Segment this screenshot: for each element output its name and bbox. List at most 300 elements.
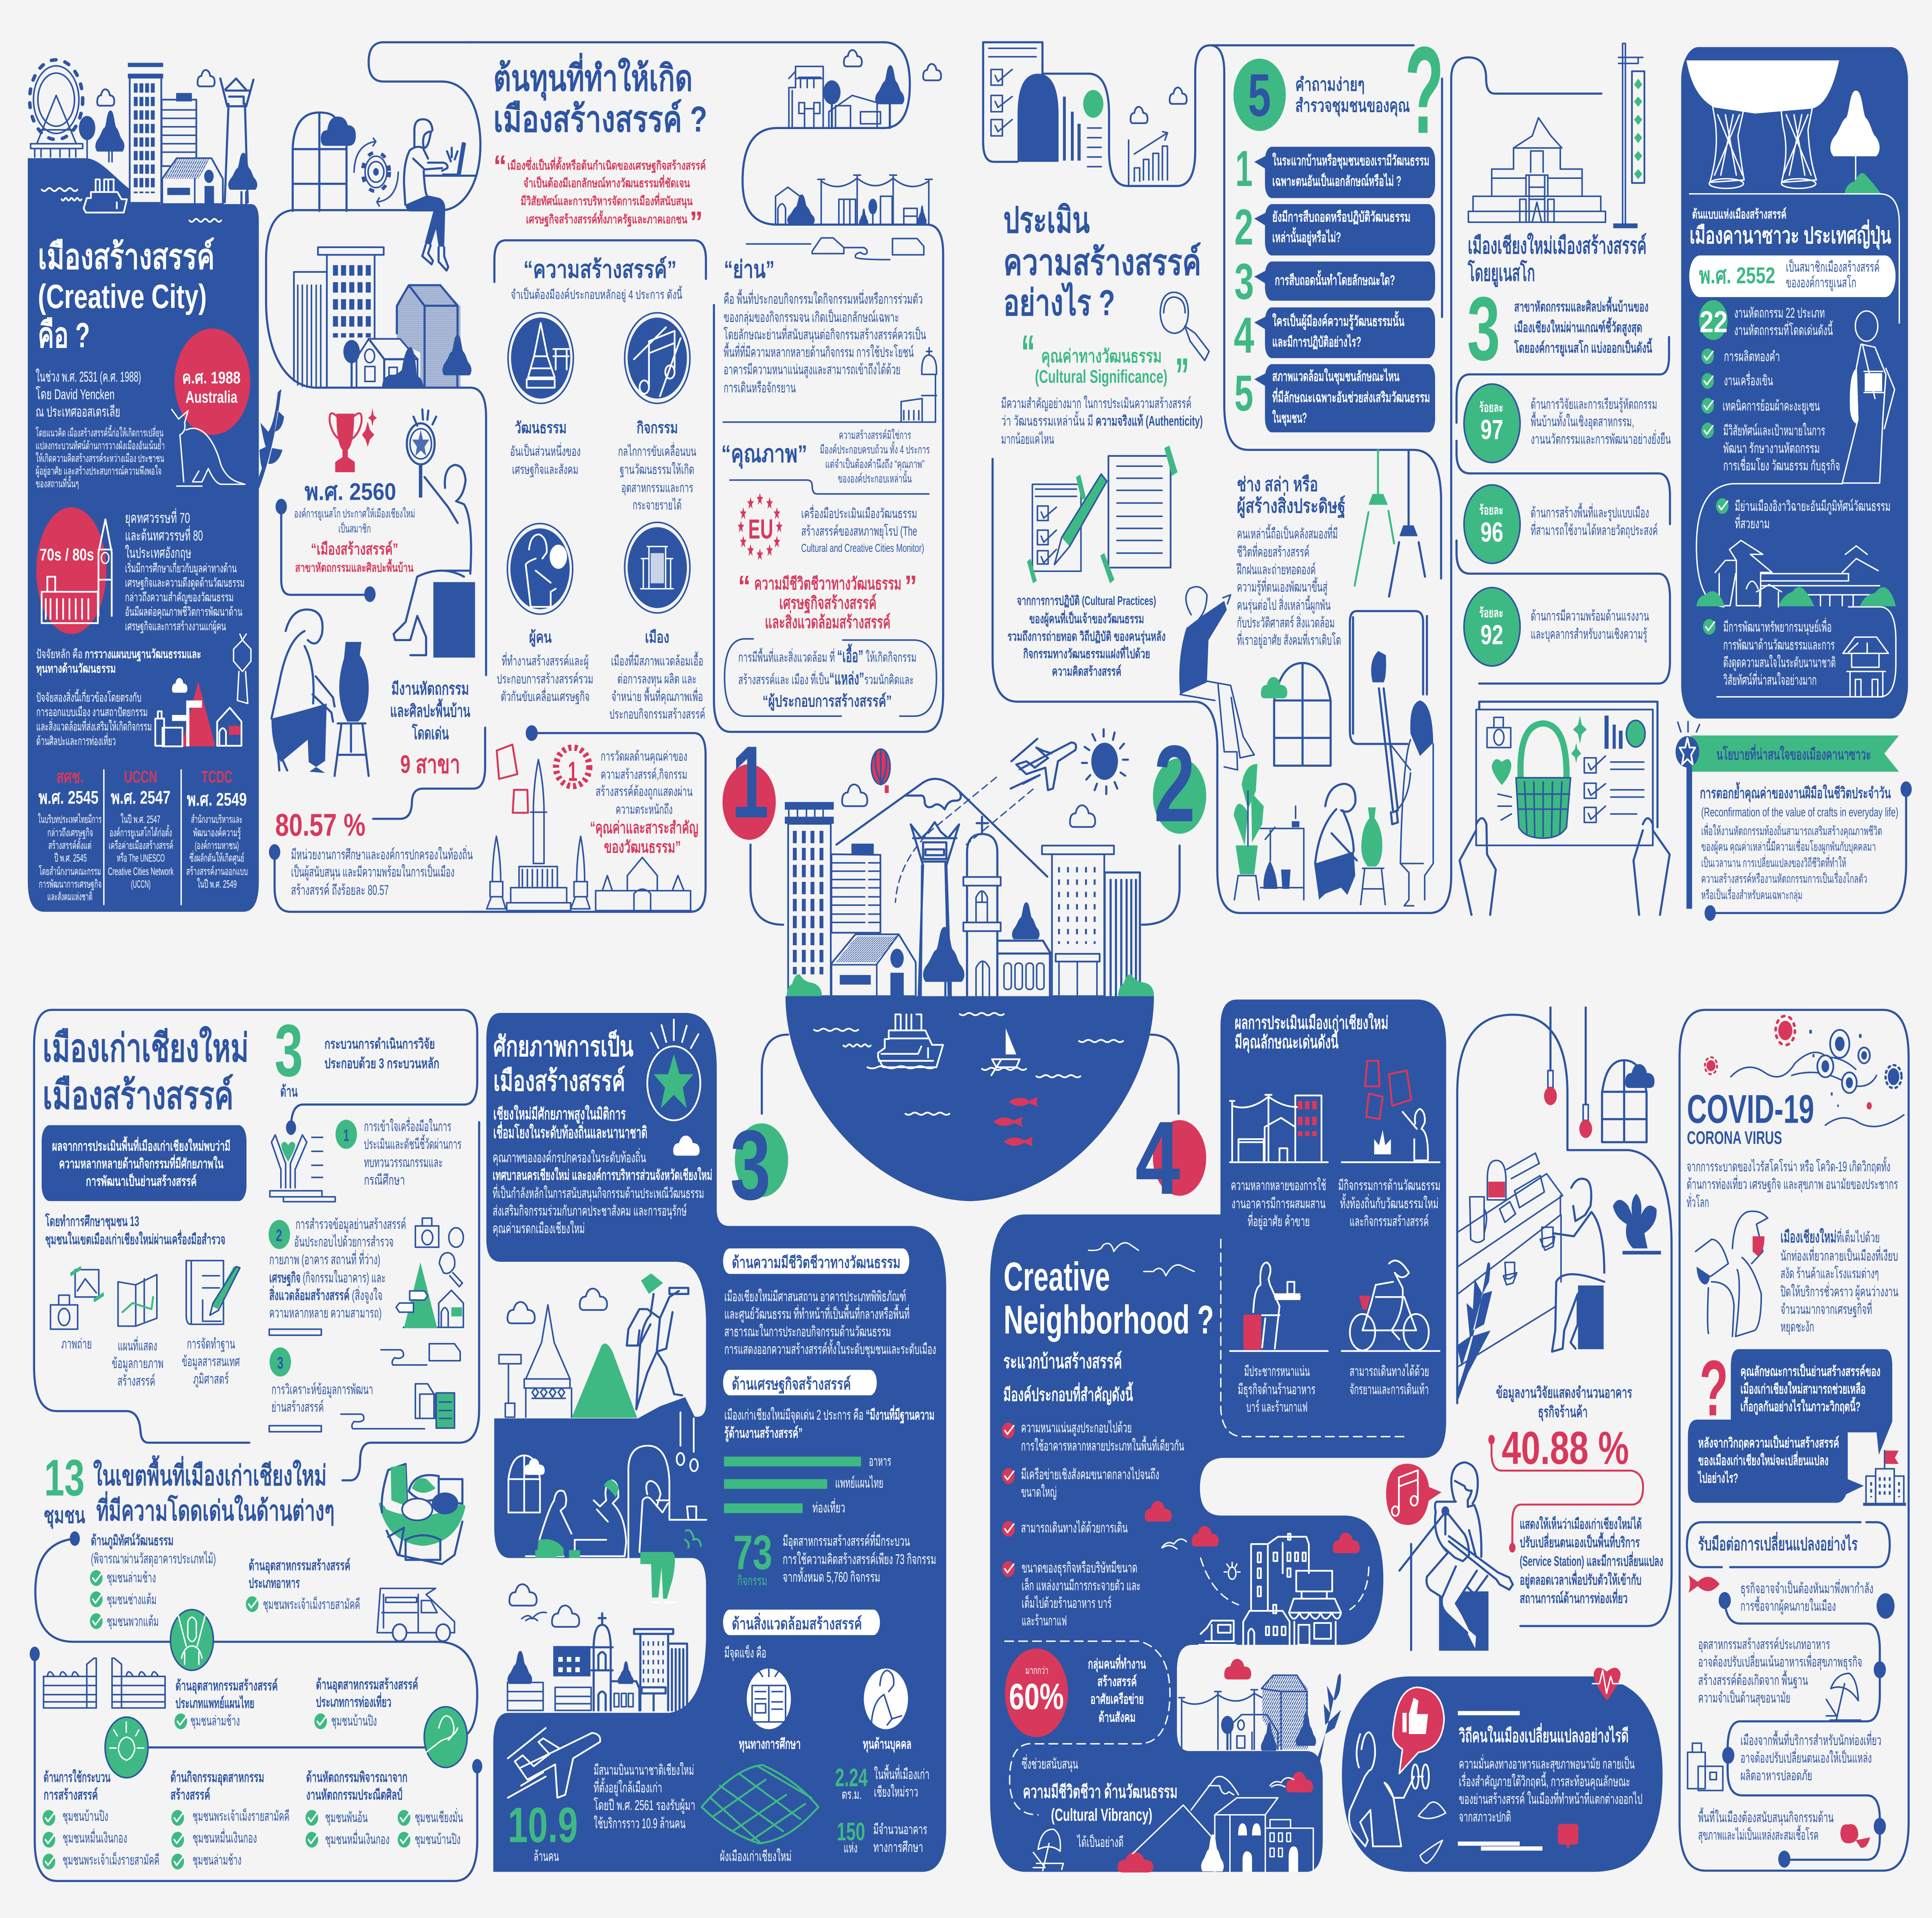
- heading: three processes: [275, 1009, 439, 1100]
- illustration: traveller with temple: [499, 1273, 688, 1418]
- question 4: [1234, 307, 1435, 364]
- stat: airport 10.9: ที่ตั้งอยู่ใกล้เมืองเก่า: [594, 1777, 662, 1796]
- flow: coping measures: อาจต้องปรับเปลี่ยนตนเองให้เป็นแหล่ง: [1740, 1748, 1872, 1766]
- stat: 150 buildings: มีจำนวนอาคาร: [873, 1822, 927, 1838]
- illustration: old town skyline: [507, 1584, 687, 1710]
- column: NESDC 2545: สศช.: [56, 768, 83, 786]
- illustration: man at cafe: [1552, 1179, 1604, 1351]
- illustration: viruses: [1705, 1016, 1904, 1127]
- text: intro: จากการระบาดของไวรัสโคโรน่า หรือ โควิด-19 เกิดวิกฤตทั้ง: [1687, 1156, 1890, 1175]
- text: intro: แปลงกระบวนทัศน์ด้านการวางผังเมืองอันเน้นย้ำ: [36, 437, 165, 452]
- text: potential: คุณค่ามรดกเมืองเชียงใหม่: [493, 1221, 585, 1237]
- tower: [911, 822, 959, 996]
- column: TCDC 2549: สำนักงานบริหารและ: [191, 813, 242, 825]
- text: cultural practices: [1007, 594, 1165, 679]
- flow: coping measures: เมืองจากพื้นที่บริการสำหรับนักท่องเที่ยว: [1740, 1730, 1881, 1748]
- speech bubbles: questions: [1688, 1344, 1892, 1503]
- heading: ประเมิน: [1003, 199, 1090, 240]
- text: district: อาคารมีความหนาแน่นสูงและสามารถเข้าถึงได้ด้วย: [724, 361, 900, 378]
- stat: 80.57 percent: สร้างสรรค์ ถึงร้อยละ 80.57: [291, 882, 389, 898]
- icon: database tool: [182, 1261, 240, 1388]
- panel: assessing creativity: [983, 21, 1451, 913]
- text: city life change: [1458, 1711, 1643, 1851]
- column: UCCN 2547: UCCN: [124, 768, 157, 786]
- icon: heart pulse: [1592, 1668, 1622, 1701]
- section: creative economy: มีอุตสาหกรรมสร้างสรรค์ที่มีกระบวน: [783, 1531, 910, 1550]
- text: key factors: ทุนทางด้านวัฒนธรรม: [36, 662, 116, 677]
- illustration: buildings in light cutout: [1179, 1675, 1316, 1751]
- stat: 92 percent: และบุคลากรสำหรับงานเชิงความรู้: [1531, 627, 1647, 643]
- list: crafts: มีวิสัยทัศน์และเป้าหมายในการ: [1723, 423, 1825, 439]
- group: creative industry activity: [170, 1770, 289, 1869]
- question 1: 1: [1235, 140, 1253, 197]
- icon: leaf branch: [1457, 1263, 1492, 1403]
- list: elements: สามารถเดินทางได้ด้วยการเดิน: [1021, 1520, 1128, 1536]
- list: crafts: งานเครื่องเขิน: [1724, 371, 1773, 389]
- bar chart: creative jobs: [724, 1453, 891, 1516]
- callout: cultural value: “คุณค่าและสาระสำคัญ: [590, 819, 698, 838]
- heading: [1003, 1243, 1214, 1405]
- list: crafts: [1699, 300, 1840, 474]
- stat: 80.57 percent: เป็นผู้สนับสนุน และมีความพร้อมในการเป็นเมือง: [291, 863, 454, 881]
- number 2: 2: [1154, 723, 1195, 844]
- group: cultural landscape: ชุมชนล่ามช้าง: [107, 1570, 156, 1586]
- panel: creative capital left outline and art: [259, 42, 537, 912]
- icon: heart message: [1558, 1824, 1578, 1850]
- text: cultural practices: กิจกรรมทางวัฒนธรรมแฝงที่ไปด้วย: [1023, 645, 1150, 661]
- feature: cultural activities: มีกิจกรรมการด้านวัฒนธรรม: [1338, 1178, 1440, 1193]
- column: NESDC 2545: และสังคมแห่งชาติ: [48, 891, 92, 903]
- group: cultural landscape: (พิจารณาผ่านวัสดุอาคารประเภทไม้): [91, 1551, 216, 1567]
- stat: more than 60 percent: [1005, 1641, 1170, 1815]
- icon: photo tool: [51, 1266, 104, 1352]
- stat: 96 percent: 96: [1481, 517, 1503, 548]
- illustration: cafe counter: [1458, 1153, 1563, 1367]
- text: 2560 award: สาขาหัตถกรรมและศิลปะพื้นบ้าน: [295, 558, 413, 575]
- group: fine crafts: [306, 1770, 463, 1848]
- list: crafts: การผลิตทองคำ: [1724, 349, 1780, 364]
- stat: 97 percent: งานนวัตกรรมและการพัฒนาอย่างยั่งยืน: [1531, 430, 1671, 447]
- list: elements: ขนาดใหญ่: [1021, 1484, 1057, 1500]
- text: service station: อยู่ตลอดเวลาเพื่อปรับตัวให้เข้ากับ: [1520, 1570, 1641, 1589]
- list: elements: ขนาดของธุรกิจหรือบริษัทมีขนาด: [1022, 1561, 1138, 1576]
- text: cultural practices: รวมถึงการถ่ายทอด วิถีปฏิบัติ ของคนรุ่นหลัง: [1007, 629, 1165, 645]
- icon: EU stars: [738, 493, 782, 560]
- text: nine branches: 9 สาขา: [400, 751, 460, 779]
- text: intro: โดย David Yencken: [36, 386, 115, 403]
- illustration: laptop worker, window and buildings: [293, 112, 475, 388]
- panel: what is a creative city: [28, 60, 259, 912]
- element: city: เมืองที่มีสภาพแวดล้อมเอื้อ: [611, 652, 703, 668]
- group: thai medicine: ชุมชนล่ามช้าง: [190, 1714, 240, 1729]
- element: people: ประกอบการสร้างสรรค์รวม: [497, 672, 594, 686]
- list: crafts: 22: [1699, 305, 1728, 339]
- column: TCDC 2549: TCDC: [201, 768, 232, 786]
- quote: cultural significance: คุณค่าทางวัฒนธรรม: [1041, 346, 1162, 368]
- stat: 97 percent: ด้านการวิจัยและการเรียนรู้หัตถกรรม: [1531, 397, 1657, 413]
- section: cultural vibrancy: การแสดงออกความสร้างสรรค์ทั้งในระดับชุมชนและระดับเมือง: [724, 1339, 936, 1358]
- list: crafts: การเชื่อมโยง วัฒนธรรม กับธุรกิจ: [1723, 456, 1840, 474]
- text: tourists gone: จำนวนมากจากเศรษฐกิจที่: [1781, 1300, 1872, 1318]
- icon: photo tool: ภาพถ่าย: [61, 1336, 92, 1352]
- text: craftsmen: ผู้สร้างสิ่งประดิษฐ์: [1237, 492, 1345, 519]
- text: 2560 award: องค์การยูเนสโก ประกาศให้เมืองเชียงใหม่: [294, 507, 415, 521]
- callout: result: การพัฒนาเป็นย่านสร้างสรรค์: [86, 1173, 197, 1189]
- group: fine crafts: ชุมชนบ้านปิง: [415, 1832, 461, 1848]
- feature: mixed use: [1230, 1095, 1328, 1230]
- column: NESDC 2545: [38, 768, 181, 905]
- text: reconfirmation of crafts: การตอกย้ำคุณค่าของงานฝีมือในชีวิตประจำวัน: [1700, 782, 1891, 803]
- text: city life change: ของย่านสร้างสรรค์ ในเมืองที่ทำหน้าที่แตกต่างออกไป: [1459, 1789, 1643, 1807]
- heading: 13 communities: 13: [44, 1449, 85, 1507]
- pill: 2552: ขององค์การยูเนสโก: [1786, 275, 1856, 291]
- number 3 with text: 3: [1467, 278, 1500, 380]
- text: cultural vibrancy: [1022, 1754, 1177, 1850]
- icon: trophy: [330, 408, 377, 472]
- stat: 96 percent: [1464, 485, 1658, 563]
- stat: airport 10.9: มีสนามบินนานาชาติเชียงใหม่: [594, 1762, 694, 1778]
- group: creative process: ชุมชนหมื่นเงินกอง: [63, 1828, 127, 1847]
- heading: three processes: กระบวนการดำเนินการวิจัย: [325, 1036, 435, 1052]
- section: cultural vibrancy: [723, 1248, 936, 1358]
- pill: 2552: พ.ศ. 2552: [1699, 263, 1775, 289]
- text: intro: ให้เกิดความคิดสร้างสรรค์ระหว่างเมือง ประชาชน: [36, 452, 164, 465]
- illustration: exercising woman: [1349, 1732, 1429, 1847]
- step 2: กายภาพ (อาคาร สถานที่ ที่ว่าง): [269, 1250, 380, 1268]
- text: authenticity: มากน้อยแค่ไหน: [1001, 431, 1054, 447]
- heading: 13 communities: ในเขตพื้นที่เมืองเก่าเชียงใหม่: [93, 1455, 327, 1491]
- section: creative environment: ทุนด้านบุคคล: [863, 1736, 912, 1753]
- flow: coping measures: อุตสาหกรรมสร้างสรรค์ประเภทอาหาร: [1698, 1637, 1830, 1653]
- text: key factors: ด้านศิลปะและการท่องเที่ยว: [36, 733, 116, 748]
- text: city life change: เรื่องสำคัญภายใต้วิกฤตนี้, การสะท้อนคุณลักษณะ: [1459, 1771, 1630, 1790]
- step 1: ประเมินและดัชนีชี้วัดผ่านการ: [364, 1134, 461, 1152]
- text: nine branches: [390, 679, 470, 779]
- section: creative economy: ด้านเศรษฐกิจสร้างสรรค์: [732, 1375, 851, 1394]
- column: TCDC 2549: สร้างสรรค์งานออกแบบ: [186, 865, 248, 877]
- stat: airport 10.9: ล้านคน: [534, 1849, 559, 1864]
- question 2: ยังมีการสืบถอดหรือปฏิบัติวัฒนธรรม: [1272, 209, 1410, 225]
- lamps and window: [1544, 1008, 1655, 1142]
- group: creative industry activity: ด้านกิจกรรมอุตสาหกรรม: [170, 1770, 264, 1786]
- text: survey tools: [45, 1212, 225, 1248]
- column: UCCN 2547: (UCCN): [131, 878, 151, 890]
- illustration: seated man: [1179, 587, 1254, 770]
- question 5: สภาพแวดล้อมในชุมชนลักษณะไหน: [1272, 368, 1400, 385]
- group: fine crafts: ด้านหัตถกรรมพิจารณาจาก: [306, 1770, 408, 1785]
- illustration: potter woman: [271, 609, 369, 776]
- icon: city hall with flag: [1863, 1450, 1906, 1506]
- quote: จำเป็นต้องมีเอกลักษณ์ทางวัฒนธรรมที่ชัดเจน: [523, 174, 690, 190]
- heading: เมืองเชียงใหม่เมืองสร้างสรรค์: [1468, 232, 1646, 259]
- text: potential: ที่เป็นกำลังหลักในการสนับสนุนกิจกรรมด้านประเพณีวัฒนธรรม: [493, 1183, 704, 1202]
- text: craftsmen: [1236, 474, 1345, 649]
- quote: vibrancy: [738, 570, 917, 632]
- text: cultural vibrancy: ซึ่งช่วยสนับสนุน: [1022, 1754, 1078, 1773]
- group: tourism: ประเภทการท่องเที่ยว: [316, 1692, 391, 1710]
- quote: vibrancy: ”: [905, 570, 917, 603]
- group: food industry: ประเภทอาหาร: [249, 1576, 300, 1591]
- stat: 40.88 percent: [1488, 1384, 1643, 1552]
- text: tourists gone: สงัด ร้านค้าและโรงแรมต่างๆ: [1781, 1265, 1879, 1282]
- number five heading: [1233, 21, 1444, 160]
- icon: map tool: [112, 1275, 163, 1389]
- stat: 40.88 percent: ธุรกิจร้านค้า: [1538, 1404, 1588, 1421]
- heading: เมืองสร้างสรรค์: [493, 1065, 625, 1097]
- step 1: [270, 1117, 461, 1202]
- text: tourists gone: ปิดให้บริการชั่วคราว ผู้คนว่างงาน: [1781, 1282, 1898, 1300]
- pill: 2552: เป็นสมาชิกเมืองสร้างสรรค์: [1786, 258, 1880, 275]
- heading: ศักยภาพการเป็น: [493, 1029, 633, 1062]
- callout: cultural value: 1: [568, 756, 577, 787]
- icon: old city walls: [44, 1658, 165, 1708]
- number five heading: ?: [1405, 21, 1444, 160]
- list: elements: มีเครือข่ายเชิงสังคมขนาดกลางไปจนถึง: [1021, 1467, 1159, 1482]
- element: city: จำหน่าย พื้นที่คุณภาพเพื่อ: [611, 687, 703, 705]
- text: intro: ทั่วโลก: [1687, 1193, 1709, 1210]
- column: UCCN 2547: Creative Cities Network: [108, 865, 174, 877]
- element: culture: วัฒนธรรม: [515, 419, 567, 436]
- plane: [1011, 739, 1076, 790]
- callout: historic district: มีย่านเมืองอิงาวิฉายะอันมีภูมิทัศน์วัฒนธรรม: [1735, 498, 1891, 515]
- illustration: hands holding board with basket: [1460, 702, 1670, 915]
- list: crafts: เทคนิคการย้อมผ้าคะงะยูเซน: [1723, 398, 1820, 415]
- group: food industry: [246, 1557, 360, 1613]
- list: elements: การใช้อาคารหลากหลายประเภทในพื้นที่เดียวกัน: [1021, 1436, 1184, 1454]
- text: 70s and 80s: ยุคทศวรรษที่ 70: [125, 508, 190, 527]
- illustration: central city on a bowl: [723, 723, 1206, 1220]
- text: intro: ในช่วง พ.ศ. 2531 (ค.ศ. 1988): [36, 369, 141, 385]
- stat: airport 10.9: 10.9: [508, 1797, 578, 1853]
- callout: enabling environment: สร้างสรรค์และ เมือง ที่เป็น “แหล่ง” รวมนักคิดและ: [738, 669, 914, 688]
- illustration: masked people: [1696, 1211, 1768, 1336]
- subheading: creativity: [494, 240, 706, 302]
- stat: 40.88 percent: ข้อมูลงานวิจัยแสดงจำนวนอาคาร: [1496, 1384, 1632, 1402]
- column: TCDC 2549: พ.ศ. 2549: [187, 789, 247, 809]
- heading: [43, 1026, 249, 1117]
- stat: 150 buildings: ทางการศึกษา: [873, 1840, 923, 1855]
- callout: cultural value: การวัดผลด้านคุณค่าของ: [600, 749, 687, 765]
- callout: historic district: [1696, 484, 1896, 697]
- element: activity: กลไกการขับเคลื่อนบน: [618, 442, 696, 459]
- text: quality: ความสร้างสรรค์มิใช่การ: [839, 429, 911, 442]
- icon: plant: [1613, 1194, 1661, 1254]
- element: culture: [508, 313, 581, 477]
- text: 70s and 80s: กล่าวถึงความสำคัญของวัฒนธรรม: [125, 591, 233, 604]
- speech bubbles: questions: หลังจากวิกฤตความเป็นย่านสร้างสรรค์: [1698, 1435, 1839, 1450]
- outline: [1451, 57, 1670, 876]
- text: city life change: ความมั่นคงทางอาหารและสุขภาพอนามัย กลายเป็น: [1459, 1754, 1635, 1773]
- stat: 92 percent: 92: [1481, 619, 1503, 651]
- heading: ต้นทุนที่ทำให้เกิด: [493, 52, 692, 101]
- quote: vibrancy: “: [738, 570, 750, 603]
- icon: songthaew truck: [377, 1588, 454, 1641]
- element: culture: อันเป็นส่วนหนึ่งของ: [510, 442, 581, 459]
- text: human resources: ดึงดูดความสนใจในระดับนานาชาติ: [1723, 655, 1836, 671]
- speech bubbles: questions: เกื้อกูลกันอย่างไรในภาวะวิกฤตนี้?: [1740, 1397, 1861, 1415]
- text: cultural vibrancy: ความมีชีวิตชีวา ด้านวัฒนธรรม: [1023, 1782, 1177, 1802]
- column: UCCN 2547: พ.ศ. 2547: [111, 787, 170, 808]
- quote: เศรษฐกิจสร้างสรรค์ทั้งภาครัฐและภาคเอกชน: [526, 210, 687, 227]
- illustration: hillside town: [1133, 1777, 1313, 1872]
- list: elements: [1002, 1420, 1184, 1629]
- text: service station: แสดงให้เห็นว่าเมืองเก่าเชียงใหม่ได้: [1520, 1515, 1642, 1532]
- text: survey tools: โดยทำการศึกษาชุมชน 13: [45, 1212, 139, 1230]
- quote: มีวิสัยทัศน์และการบริหารจัดการเมืองที่สนับสนุน: [521, 192, 693, 209]
- element: culture: เศรษฐกิจและสังคม: [512, 462, 578, 477]
- map: old city: ผังเมืองเก่าเชียงใหม่: [720, 1848, 792, 1864]
- text: EU monitor: เครื่องมือประเมินเมืองวัฒนธรรม: [801, 504, 917, 521]
- column: NESDC 2545: โดยสำนักงานคณะกรรม: [39, 865, 101, 877]
- text: potential: เทศบาลนครเชียงใหม่ และองค์การบริหารส่วนจังหวัดเชียงใหม่: [493, 1167, 712, 1183]
- badge: 1988 Australia: Australia: [185, 388, 238, 407]
- text: 70s and 80s: เศรษฐกิจและการสร้างงานแก่ผู้คน: [125, 620, 226, 634]
- icon: magnifier: [1160, 292, 1209, 361]
- stat: 80.57 percent: [269, 807, 473, 898]
- stat: 92 percent: [1464, 587, 1649, 666]
- feature: mixed use: ความหลากหลายของการใช้: [1231, 1178, 1326, 1193]
- text: potential: เชียงใหม่มีศักยภาพสูงในมิติการ: [493, 1105, 626, 1124]
- subheading: coping: รับมือต่อการเปลี่ยนแปลงอย่างไร: [1698, 1532, 1858, 1554]
- flow: coping measures: พื้นที่ในเมืองต้องสนับสนุนกิจกรรมด้าน: [1698, 1807, 1834, 1826]
- callout: result: [42, 1125, 247, 1201]
- stat: 150 buildings: [837, 1818, 927, 1855]
- panel: cafe research: [1457, 1008, 1672, 1626]
- flow: coping measures: ความจำเป็นด้านสุขอนามัย: [1698, 1689, 1791, 1706]
- text: district: คือ พื้นที่ประกอบกิจกรรมใดกิจกรรมหนึ่งหรือการร่วมตัว: [724, 289, 923, 307]
- section: creative environment: [723, 1610, 912, 1753]
- text: human resources: การพัฒนาด้านวัฒนธรรมและการ: [1723, 638, 1835, 653]
- pill: 2552: [1689, 255, 1896, 297]
- heading: เมืองสร้างสรรค์ ?: [493, 99, 707, 140]
- feature: dense cafes: บาร์ และร้านกาแฟ: [1247, 1399, 1308, 1415]
- section: creative environment: ด้านสิ่งแวดล้อมสร้างสรรค์: [732, 1613, 862, 1632]
- quote: เมืองซึ่งเป็นที่ตั้งหรือต้นกำเนิดของเศรษฐกิจสร้างสรรค์: [507, 156, 706, 174]
- feature: bicycle: [1342, 1261, 1439, 1397]
- icon: map tool: ข้อมูลกายภาพ: [112, 1356, 163, 1372]
- heading: เมืองสร้างสรรค์: [43, 1074, 233, 1117]
- stat: more than 60 percent: สร้างสรรค์: [1097, 1674, 1137, 1689]
- element: city: [609, 522, 705, 722]
- section: creative economy: การใช้ความคิดสร้างสรรค์เพียง 73 กิจกรรม: [783, 1552, 936, 1567]
- element: activity: [618, 313, 696, 512]
- icon: japanese gate: [1843, 637, 1888, 697]
- text: cultural vibrancy: ได้เป็นอย่างดี: [1077, 1833, 1124, 1850]
- text: reconfirmation of crafts: (Reconfirmation of the value of crafts in everyday life): [1701, 805, 1898, 819]
- text: potential: คุณภาพขององค์กรปกครองในระดับท้องถิ่น: [493, 1148, 646, 1166]
- step 3: [269, 1344, 460, 1432]
- banner: Kanazawa policy: [1675, 722, 1899, 909]
- text: key factors: ปัจจัยหลัก คือ การวางแผนบนฐานวัฒนธรรมและ: [36, 648, 201, 662]
- column: NESDC 2545: การพัฒนาการเศรษฐกิจ: [39, 878, 102, 890]
- step 2: การสำรวจข้อมูลย่านสร้างสรรค์: [296, 1217, 406, 1233]
- quote: ”: [690, 206, 703, 239]
- feature: mixed use: ที่อยู่อาศัย ค้าขาย: [1248, 1212, 1310, 1230]
- text: district: การเดินหรือจักรยาน: [724, 381, 796, 396]
- text: survey tools: ชุมชนในเขตเมืองเก่าเชียงใหม่ผ่านเครื่องมือสำรวจ: [45, 1229, 225, 1248]
- stat: 96 percent: ร้อยละ: [1479, 503, 1503, 517]
- church: [963, 817, 1051, 996]
- quote: vibrancy: และสิ่งแวดล้อมสร้างสรรค์: [765, 610, 891, 632]
- callout: historic district: ที่สวยงาม: [1735, 514, 1770, 532]
- text: city life change: จากสภาวะปกติ: [1459, 1809, 1511, 1825]
- number 3 with text: [1467, 278, 1653, 380]
- icon: database tool: ภูมิศาสตร์: [193, 1371, 229, 1388]
- tree center: [923, 927, 964, 996]
- section: creative economy: เมืองเก่าเชียงใหม่มีจุดเด่น 2 ประการ คือ “มีงานที่มีฐานความ: [724, 1404, 935, 1424]
- banner: Kanazawa policy: นโยบายที่น่าสนใจของเมืองคานาซาวะ: [1716, 744, 1871, 763]
- text: service station: [1520, 1515, 1663, 1607]
- heading: [1687, 1086, 1814, 1148]
- text: key factors: ปัจจัยสองสิ่งนี้เกี่ยวข้องโดยตรงกับ: [36, 689, 141, 705]
- heading: มีองค์ประกอบที่สำคัญดังนี้: [1003, 1382, 1133, 1405]
- callout: cultural value: ของวัฒนธรรม”: [604, 838, 681, 856]
- illustration: neighborhood town: [1117, 1501, 1369, 1872]
- flow: coping measures: ผลิตอาหารปลอดภัย: [1740, 1768, 1812, 1784]
- list: elements: ความหนาแน่นสูงประกอบไปด้วย: [1021, 1420, 1132, 1436]
- text: reconfirmation of crafts: ความสร้างสรรค์หรืองานหัตถกรรมการเป็นเรื่องไกลตัว: [1701, 870, 1867, 886]
- text: 2560 award: [276, 478, 415, 602]
- quote: cultural significance: “: [1021, 325, 1035, 380]
- element: people: ที่ทำงานสร้างสรรค์และผู้: [502, 652, 588, 669]
- section: creative economy: รู้ด้านงานสร้างสรรค์”: [724, 1425, 803, 1442]
- route lines: [30, 1531, 482, 1881]
- question 1: เฉพาะตนอันเป็นเอกลักษณ์หรือไม่ ?: [1272, 172, 1401, 189]
- text: nine branches: โดดเด่น: [412, 723, 449, 743]
- upper panel: assessment result: ผลการประเมินเมืองเก่าเชียงใหม่: [1235, 1012, 1388, 1033]
- clouds balloon: [842, 749, 1095, 827]
- text: intro: ของสถานที่นั้นๆ: [36, 476, 79, 490]
- quote: [493, 150, 706, 239]
- heading: ระแวกบ้านสร้างสรรค์: [1003, 1351, 1122, 1372]
- heading: Neighborhood ?: [1003, 1297, 1214, 1342]
- element: city: เมือง: [645, 628, 669, 646]
- stat: airport 10.9: ใช้บริการราว 10.9 ล้านคน: [594, 1816, 685, 1831]
- text: district: โดยลักษณะย่านที่สนับสนุนต่อกิจกรรมสร้างสรรค์ควรเป็น: [724, 325, 926, 343]
- number 3: 3: [730, 1110, 771, 1220]
- feature: cultural activities: ทั้งท้องถิ่นกับวัฒนธรรมใหม่: [1340, 1193, 1439, 1212]
- flow: coping measures: $: [1883, 1598, 1889, 1617]
- list: elements: เล็ก แหล่งงานมีการกระจายตัว และ: [1022, 1577, 1141, 1594]
- icon: food bowl: [379, 1464, 466, 1564]
- stat: 150 buildings: 150: [837, 1818, 865, 1846]
- section: cultural vibrancy: เมืองเชียงใหม่มีศาสนสถาน อาคารประเภทพิพิธภัณฑ์: [724, 1288, 906, 1305]
- stat: more than 60 percent: 60%: [1009, 1676, 1064, 1717]
- text: 70s and 80s: เริ่มมีการศึกษาเกี่ยวกับมูลค่าทางด้าน: [125, 560, 237, 576]
- group: creative process: ชุมชนบ้านปิง: [63, 1809, 108, 1825]
- text: district: [724, 256, 926, 396]
- column: UCCN 2547: หรือ The UNESCO: [117, 852, 165, 864]
- stat: more than 60 percent: มากกว่า: [1026, 1665, 1048, 1676]
- text: intro: ผู้อยู่อาศัย และสร้างประสบการณ์ความพึงพอใจ: [36, 465, 162, 478]
- step 3: ย่านสร้างสรรค์: [271, 1399, 324, 1415]
- group: creative process: ด้านการใช้กระบวน: [44, 1769, 111, 1785]
- callout: cultural value: ความสร้างสรรค์,กิจกรรม: [600, 767, 687, 782]
- group: fine crafts: งานหัตถกรรมประณีตศิลป์: [306, 1787, 402, 1803]
- number 1: 1: [731, 725, 769, 839]
- panel: Chiang Mai UNESCO criteria: [1451, 43, 1671, 915]
- step 2: [269, 1217, 463, 1335]
- column: NESDC 2545: ปี พ.ศ. 2545: [54, 852, 87, 864]
- illustration: car and van: [747, 238, 924, 260]
- tall building: [785, 802, 881, 996]
- subheading: creativity: จำเป็นต้องมีองค์ประกอบหลักอยู่ 4 ประการ ดังนี้: [511, 286, 682, 302]
- text: authenticity: [1001, 396, 1203, 447]
- icon: thumbs up bubble: [1393, 1687, 1444, 1773]
- stat: more than 60 percent: อาศัยเครือข่าย: [1090, 1692, 1144, 1707]
- text: 2560 award: “เมืองสร้างสรรค์”: [311, 540, 398, 558]
- heading: three processes: ประกอบด้วย 3 กระบวนหลัก: [325, 1056, 439, 1072]
